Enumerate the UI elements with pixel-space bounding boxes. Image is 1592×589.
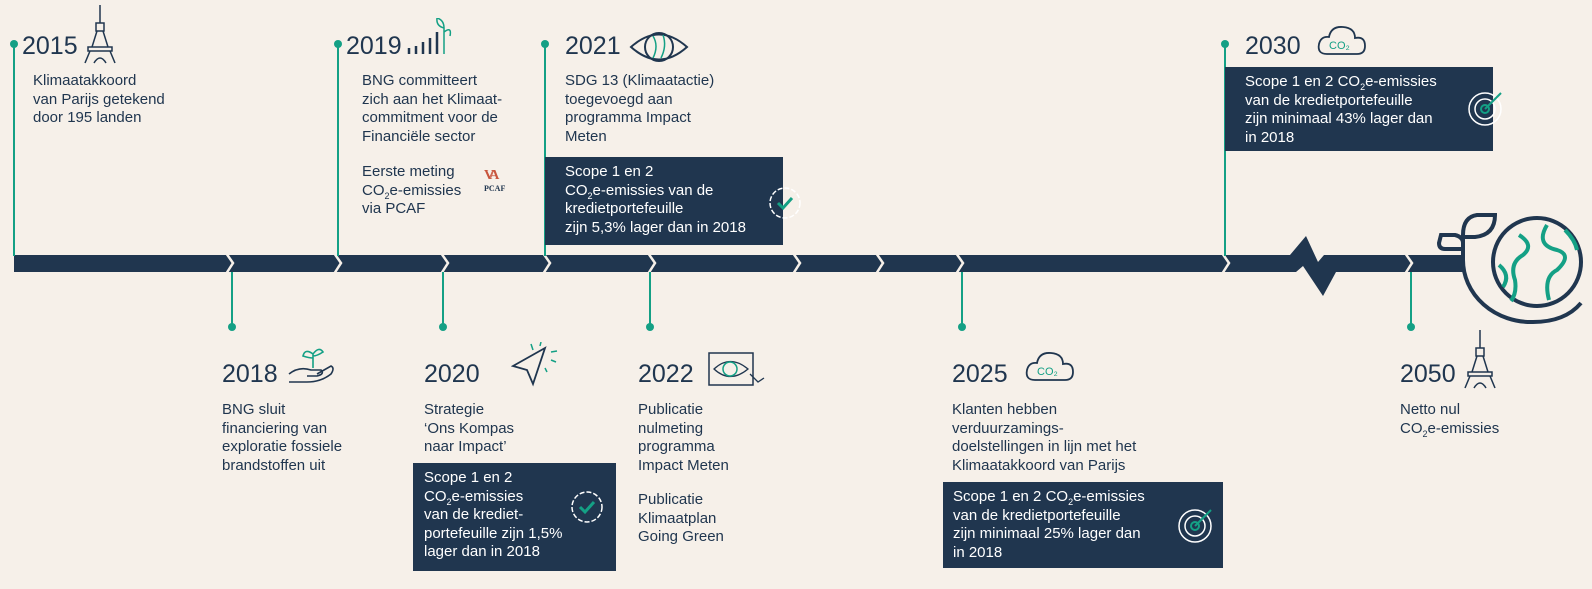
callout box (943, 482, 1223, 568)
text: Publicatie (638, 401, 703, 418)
text (222, 401, 342, 474)
heading: 2018: 2018 (222, 360, 278, 388)
icon: PCAF logo: VA (484, 168, 496, 183)
icon: PCAF logo (484, 168, 505, 193)
event: 2020 (413, 272, 616, 571)
callout box: portefeuille zijn 1,5% (424, 524, 562, 542)
callout box: Scope 1 en 2 (565, 163, 653, 180)
text: CO2e-emissies (1400, 420, 1499, 438)
callout box (545, 157, 783, 245)
icon: CO2 cloud (1318, 26, 1366, 55)
heading: 2020: 2020 (424, 360, 480, 388)
text (33, 72, 165, 126)
icon: check badge (571, 491, 603, 523)
icon: hand with plant (288, 348, 334, 383)
event: 2022 (638, 272, 764, 545)
text: doelstellingen in lijn met het (952, 438, 1136, 455)
text: BNG sluit (222, 401, 285, 418)
text: SDG 13 (Klimaatactie) (565, 72, 714, 89)
text: Financiële sector (362, 128, 475, 144)
heading: 2025: 2025 (952, 360, 1008, 388)
icon: growth bars (408, 18, 452, 54)
event: 2030 (1221, 26, 1502, 256)
icon: CO2 cloud (1026, 352, 1074, 381)
event: 2050 (1400, 272, 1499, 438)
text: programma Impact (565, 109, 691, 126)
event: 2019: via PCAF (362, 200, 425, 217)
text: Klanten hebben (952, 401, 1057, 418)
callout box: kredietportefeuille (565, 200, 683, 217)
callout box (1225, 67, 1493, 151)
event: 2015 (10, 5, 165, 256)
callout box: zijn minimaal 43% lager dan (1245, 110, 1433, 127)
text: commitment voor de (362, 109, 498, 126)
text: naar Impact’ (424, 438, 507, 455)
event: 2018 (222, 272, 342, 474)
text (1400, 401, 1499, 438)
callout box: lager dan in 2018 (424, 543, 540, 560)
icon: eye globe (630, 32, 688, 62)
icon: target (1178, 509, 1212, 543)
callout box: van de kredietportefeuille (1245, 92, 1413, 108)
text: ‘Ons Kompas (424, 420, 514, 436)
callout box: in 2018 (953, 544, 1002, 560)
icon: CO2 cloud: CO₂ (1037, 366, 1058, 378)
text: toegevoegd aan (565, 90, 673, 108)
callout box: in 2018 (1245, 128, 1294, 146)
callout box: zijn minimaal 25% lager dan (953, 525, 1141, 542)
heading: 2022: 2022 (638, 360, 694, 388)
text: brandstoffen uit (222, 456, 325, 474)
text: Netto nul (1400, 401, 1460, 418)
text: zich aan het Klimaat- (362, 90, 502, 108)
text: Impact Meten (638, 456, 729, 474)
callout box: Scope 1 en 2 CO2e-emissies (953, 488, 1145, 507)
icon: PCAF logo: PCAF (484, 184, 505, 193)
callout box: van de krediet- (424, 506, 523, 523)
heading: 2021: 2021 (565, 32, 621, 60)
icon: screen eye (708, 352, 764, 386)
text (952, 401, 1136, 474)
text: verduurzamings- (952, 420, 1064, 436)
callout box (413, 463, 616, 571)
event: 2019: CO2e-emissies (362, 182, 461, 200)
text: door 195 landen (33, 109, 141, 126)
text: van Parijs getekend (33, 90, 165, 108)
event: 2019 (334, 18, 505, 256)
callout box: Scope 1 en 2 (424, 469, 512, 486)
icon: cursor arrow (511, 342, 558, 386)
heading: 2030: 2030 (1245, 32, 1301, 60)
callout box: Scope 1 en 2 CO2e-emissies (1245, 73, 1437, 92)
text: financiering van (222, 420, 327, 436)
callout box: zijn 5,3% lager dan in 2018 (565, 218, 746, 236)
text: Klimaatakkoord van Parijs (952, 456, 1125, 474)
text: Klimaatakkoord (33, 72, 136, 89)
icon: Eiffel tower (1464, 330, 1496, 388)
text: Meten (565, 128, 607, 144)
text: exploratie fossiele (222, 438, 342, 455)
icon: globe with sprout (1437, 213, 1583, 324)
event: 2022: Going Green (638, 528, 724, 545)
callout box: van de kredietportefeuille (953, 506, 1121, 524)
event: 2025 (943, 272, 1223, 568)
text: Strategie (424, 401, 484, 418)
icon: Eiffel tower (84, 5, 116, 64)
icon: target (1468, 92, 1502, 126)
callout box: CO2e-emissies (424, 488, 523, 506)
icon: check badge (769, 187, 801, 219)
event: 2022: Klimaatplan (638, 510, 716, 526)
text (638, 401, 729, 474)
text (362, 72, 502, 144)
text (565, 72, 714, 144)
heading: 2019: 2019 (346, 32, 402, 60)
text: programma (638, 438, 715, 455)
text: nulmeting (638, 420, 703, 436)
event: 2022: Publicatie (638, 491, 703, 508)
heading: 2015: 2015 (22, 32, 78, 60)
event: 2019: Eerste meting (362, 163, 455, 180)
icon: CO2 cloud: CO₂ (1329, 40, 1350, 52)
callout box: CO2e-emissies van de (565, 182, 713, 200)
heading: 2050: 2050 (1400, 360, 1456, 388)
event: 2021 (541, 32, 801, 256)
text: BNG committeert (362, 72, 477, 89)
text (424, 401, 514, 455)
